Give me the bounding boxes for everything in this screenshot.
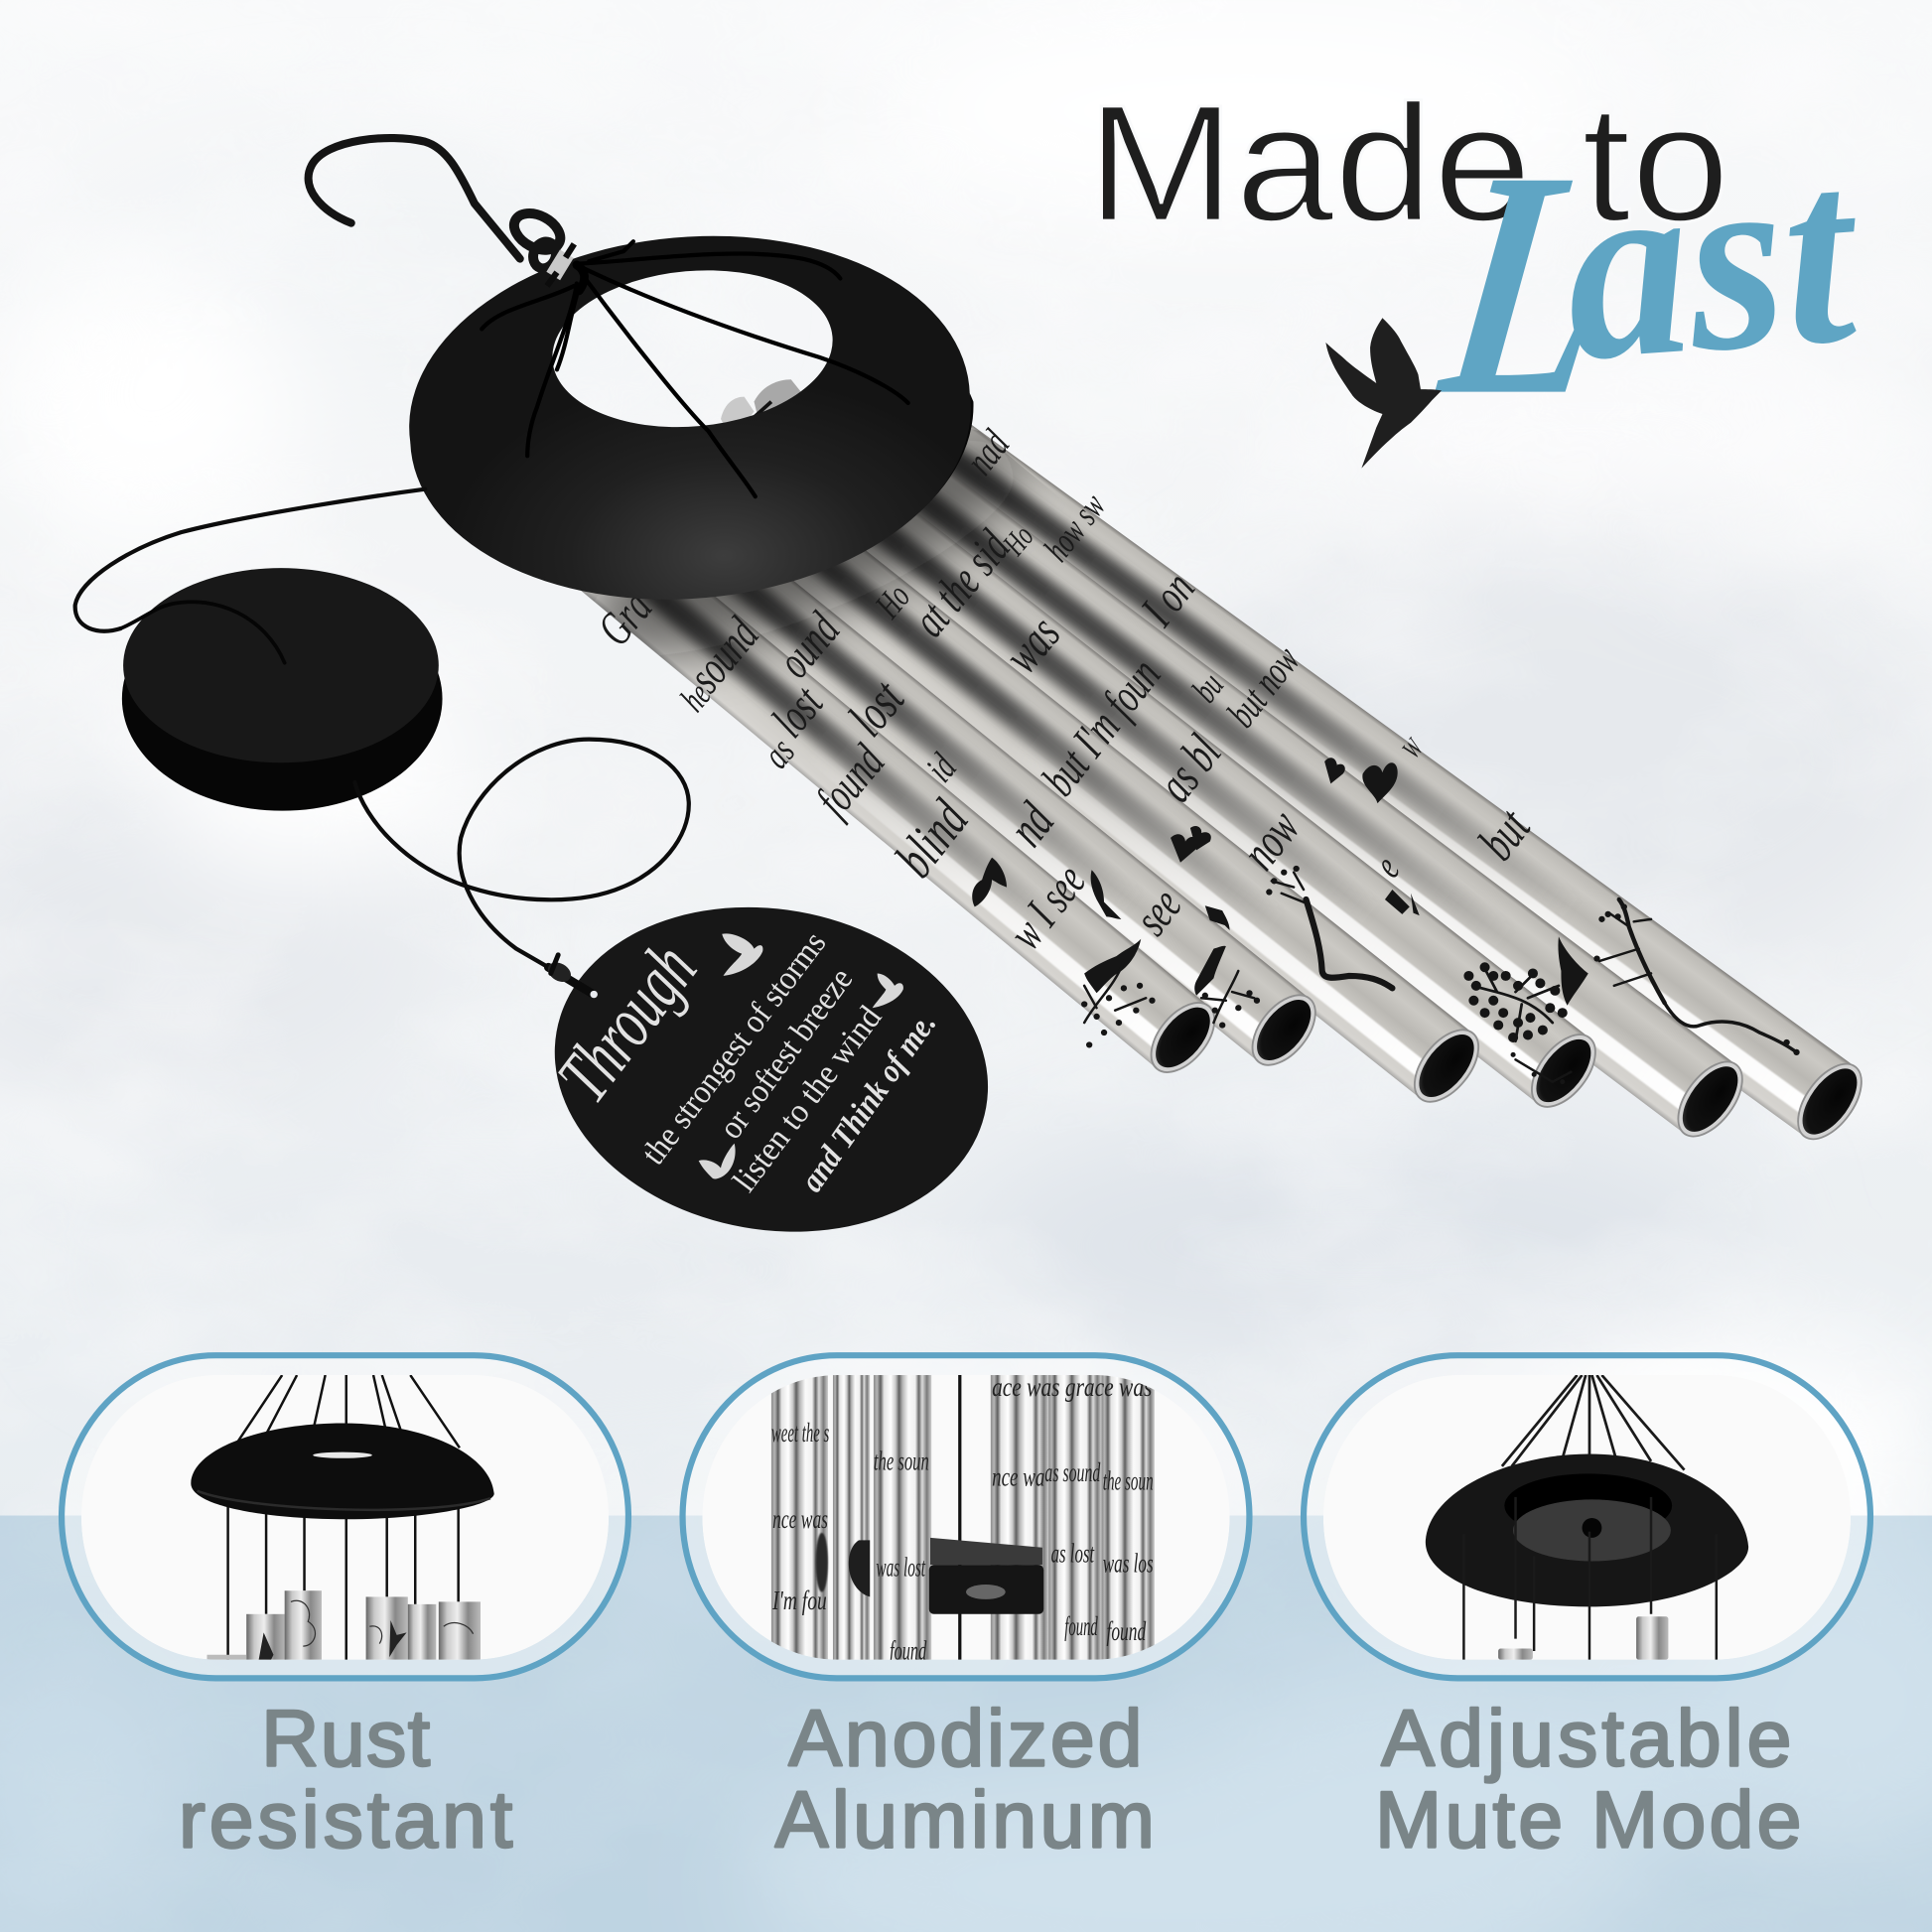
engraved verse on tubes: at the sid bbox=[902, 521, 1021, 647]
engraved verse on tubes: as bbox=[755, 731, 803, 776]
engraved verse on tubes: sound bbox=[678, 609, 769, 703]
butterflies on tag bbox=[699, 933, 903, 1178]
dome shadow on tubes bbox=[582, 429, 1046, 687]
main product: wind chime bbox=[75, 138, 1874, 1265]
caption: resistant bbox=[179, 1775, 512, 1864]
hook and ring bbox=[309, 138, 574, 286]
engraved verse on tubes: blind bbox=[884, 789, 981, 889]
cords over the dome bbox=[482, 241, 908, 496]
tube engraving: the soun bbox=[874, 1447, 929, 1476]
engraved verse on tubes: lost bbox=[762, 676, 834, 748]
tube engraving bbox=[771, 1372, 1154, 1666]
tube engraving: the soun bbox=[1103, 1465, 1154, 1495]
capsule frame bbox=[62, 1355, 628, 1678]
engraved verse on tubes: nd bbox=[996, 792, 1065, 857]
tube engraving: I'm fou bbox=[771, 1586, 827, 1615]
engraved verse on tubes: but now bbox=[1217, 637, 1309, 736]
tag verse text: listen to the wind bbox=[726, 1000, 889, 1198]
capsule frame bbox=[1304, 1355, 1870, 1678]
caption: Mute Mode bbox=[1375, 1775, 1801, 1864]
engraved verse on tubes: was bbox=[993, 606, 1071, 684]
engraved verse on tubes: Ho bbox=[996, 519, 1041, 563]
tag verse text: or softest breeze bbox=[712, 962, 860, 1146]
engraved verse on tubes bbox=[588, 421, 1542, 959]
tube engraving: as lost bbox=[1051, 1539, 1095, 1569]
pale blue lower band bbox=[0, 1516, 1932, 1932]
icon: flying bird bbox=[1325, 318, 1442, 469]
tube engraving: found bbox=[1106, 1616, 1146, 1646]
engraved verse on tubes: I on bbox=[1131, 563, 1205, 636]
silver tubes behind the dome bbox=[580, 400, 1874, 1151]
product photo bbox=[702, 1372, 1230, 1666]
top dome with hole bbox=[409, 236, 974, 600]
black clapper bbox=[816, 1375, 1043, 1660]
engraved verse on tubes: how sw bbox=[1035, 485, 1113, 569]
title: Last script bbox=[1423, 104, 1867, 462]
engraved verse on tubes: but bbox=[1466, 797, 1542, 871]
engraved verse on tubes: ound bbox=[767, 604, 851, 688]
tube engraving: nce was bbox=[772, 1504, 828, 1534]
caption: Anodized bbox=[788, 1694, 1142, 1783]
tube engraving: was lost bbox=[876, 1552, 926, 1582]
tag verse text: Through bbox=[540, 927, 713, 1117]
tube engraving: found bbox=[890, 1636, 926, 1666]
silver cylinders seen through the hole bbox=[721, 379, 801, 431]
round memorial tag bbox=[529, 874, 1014, 1265]
product photo bbox=[81, 1375, 609, 1660]
title: Made to: Made to bbox=[1087, 69, 1729, 256]
caption bbox=[179, 1694, 512, 1864]
engraved verse on tubes: w I see bbox=[999, 855, 1097, 959]
caption: Rust bbox=[261, 1694, 430, 1783]
tube engraving: was los bbox=[1103, 1549, 1154, 1579]
lower looped rope bbox=[354, 740, 689, 967]
engraved verse on tubes: bu bbox=[1184, 665, 1231, 710]
tag verse text: the strongest of storms bbox=[635, 925, 833, 1172]
panel: rust resistant bbox=[62, 1355, 628, 1864]
tube engraving: found bbox=[1064, 1611, 1098, 1641]
engraved verse on tubes: id bbox=[918, 746, 965, 790]
printed silhouettes on tubes: birds, hearts, trees bbox=[972, 758, 1588, 1006]
caption bbox=[775, 1694, 1155, 1864]
engraved verse on tubes: e bbox=[1364, 847, 1409, 886]
weight disc bbox=[121, 568, 443, 811]
caption: Adjustable bbox=[1381, 1694, 1792, 1783]
tag verse text bbox=[540, 925, 943, 1198]
engraved verse on tubes: Ho bbox=[867, 576, 918, 626]
letters ast: ast bbox=[1556, 106, 1867, 416]
engraved verse on tubes: as bl bbox=[1147, 725, 1232, 812]
tube engraving: nce wa bbox=[992, 1462, 1044, 1492]
tube engraving: weet the s bbox=[771, 1418, 829, 1448]
engraved verse on tubes: nad bbox=[956, 421, 1019, 483]
caption: Aluminum bbox=[775, 1775, 1155, 1864]
caption bbox=[1375, 1694, 1801, 1864]
tube engraving: ace was grace was bbox=[992, 1372, 1152, 1402]
tube engraving: as sound bbox=[1044, 1457, 1100, 1487]
letter L: L bbox=[1423, 104, 1627, 462]
engraved verse on tubes: Gra bbox=[588, 582, 663, 656]
tag verse text: and Think of me. bbox=[793, 1006, 943, 1198]
engraved verse on tubes: found bbox=[806, 736, 896, 827]
panel: anodized aluminum bbox=[683, 1355, 1249, 1864]
panel: adjustable mute mode bbox=[1304, 1355, 1870, 1864]
product photo bbox=[1323, 1375, 1851, 1660]
engraved verse on tubes: see bbox=[1125, 880, 1192, 945]
tag bead bbox=[544, 955, 598, 998]
engraved verse on tubes: W bbox=[1397, 733, 1430, 763]
engraved verse on tubes: lost bbox=[837, 668, 915, 747]
wind catcher rope upper bbox=[75, 489, 425, 631]
engraved verse on tubes: but I'm foun bbox=[1033, 649, 1172, 806]
capsule frame bbox=[683, 1355, 1249, 1678]
engraved verse on tubes: now bbox=[1230, 799, 1311, 880]
engraved verse on tubes: he bbox=[672, 675, 719, 719]
